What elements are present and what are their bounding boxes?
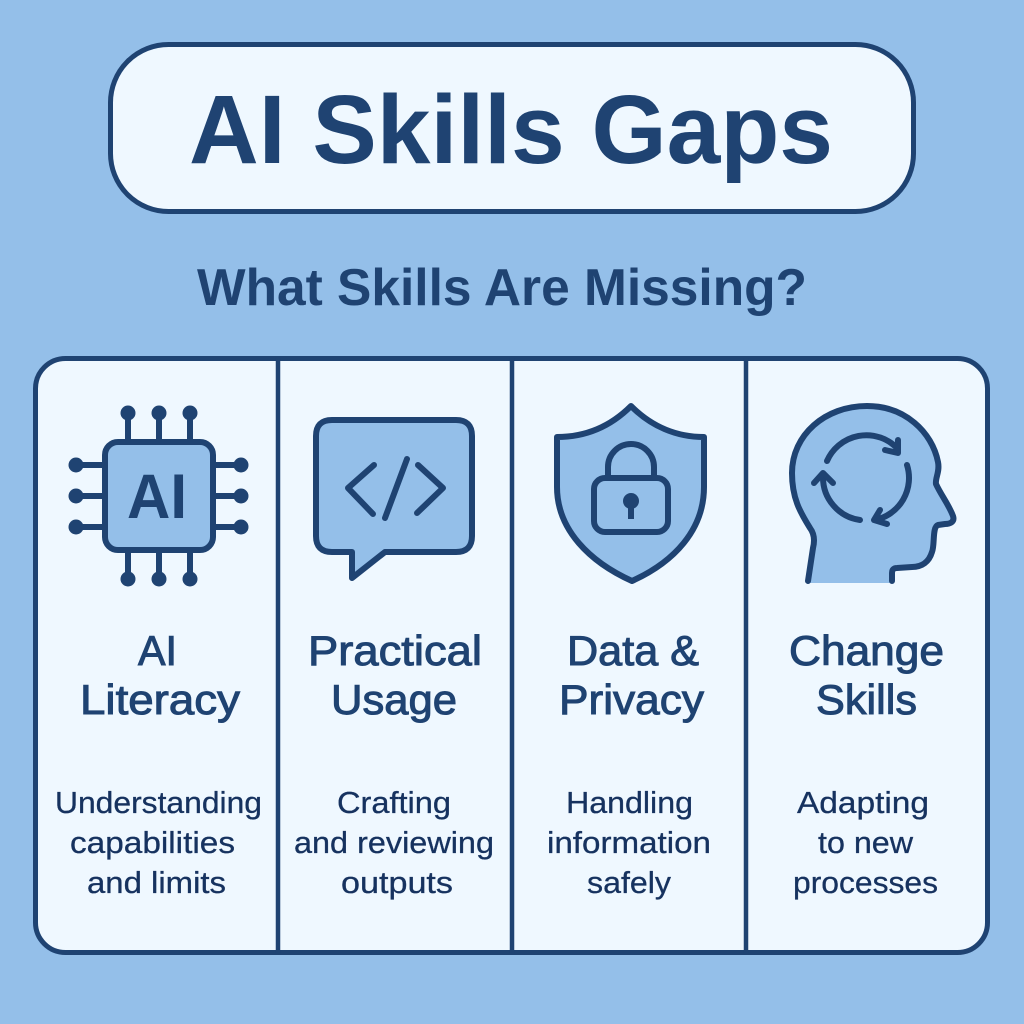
- description: AI Literacy: capabilities: [70, 825, 235, 860]
- description: AI Literacy: [55, 785, 262, 900]
- heading: Practical Usage: [308, 627, 482, 723]
- heading: Change Skills: Change: [789, 627, 944, 674]
- subtitle: What Skills Are Missing?: [197, 259, 807, 317]
- skills panel: [36, 358, 988, 953]
- icon: AI chip: AI: [127, 462, 187, 532]
- description: Change Skills: to new: [818, 825, 914, 860]
- heading: Data & Privacy: Privacy: [559, 676, 704, 723]
- description: Data & Privacy: Handling: [566, 785, 693, 820]
- heading: Practical Usage: Practical: [308, 627, 482, 674]
- heading: Change Skills: Skills: [816, 676, 917, 723]
- description: Data & Privacy: [547, 785, 711, 900]
- title banner: [110, 44, 914, 212]
- description: Data & Privacy: safely: [587, 865, 672, 900]
- description: Practical Usage: and reviewing: [294, 825, 494, 860]
- description: Change Skills: processes: [793, 865, 938, 900]
- icon: AI chip: [68, 406, 248, 586]
- heading: Data & Privacy: Data &: [567, 627, 699, 674]
- description: Practical Usage: outputs: [341, 865, 453, 900]
- description: AI Literacy: Understanding: [55, 785, 262, 820]
- heading: Change Skills: [789, 627, 944, 723]
- column: Change Skills: [789, 406, 953, 900]
- description: Data & Privacy: information: [547, 825, 711, 860]
- heading: Practical Usage: Usage: [331, 676, 457, 723]
- icon: head with cycle arrows: [792, 406, 953, 583]
- heading: AI Literacy: [80, 627, 240, 723]
- column: Data & Privacy: [547, 406, 711, 900]
- description: Practical Usage: [294, 785, 494, 900]
- description: Change Skills: [793, 785, 938, 900]
- column: AI Literacy: [55, 406, 262, 900]
- description: Change Skills: Adapting: [797, 785, 929, 820]
- description: AI Literacy: and limits: [87, 865, 226, 900]
- column: Practical Usage: [294, 420, 494, 900]
- heading: AI Literacy: AI: [138, 627, 177, 674]
- heading: AI Literacy: Literacy: [80, 676, 240, 723]
- title: AI Skills Gaps: [189, 75, 833, 184]
- icon: code speech bubble: [316, 420, 472, 578]
- icon: shield with padlock: [557, 406, 704, 581]
- heading: Data & Privacy: [559, 627, 704, 723]
- description: Practical Usage: Crafting: [337, 785, 451, 820]
